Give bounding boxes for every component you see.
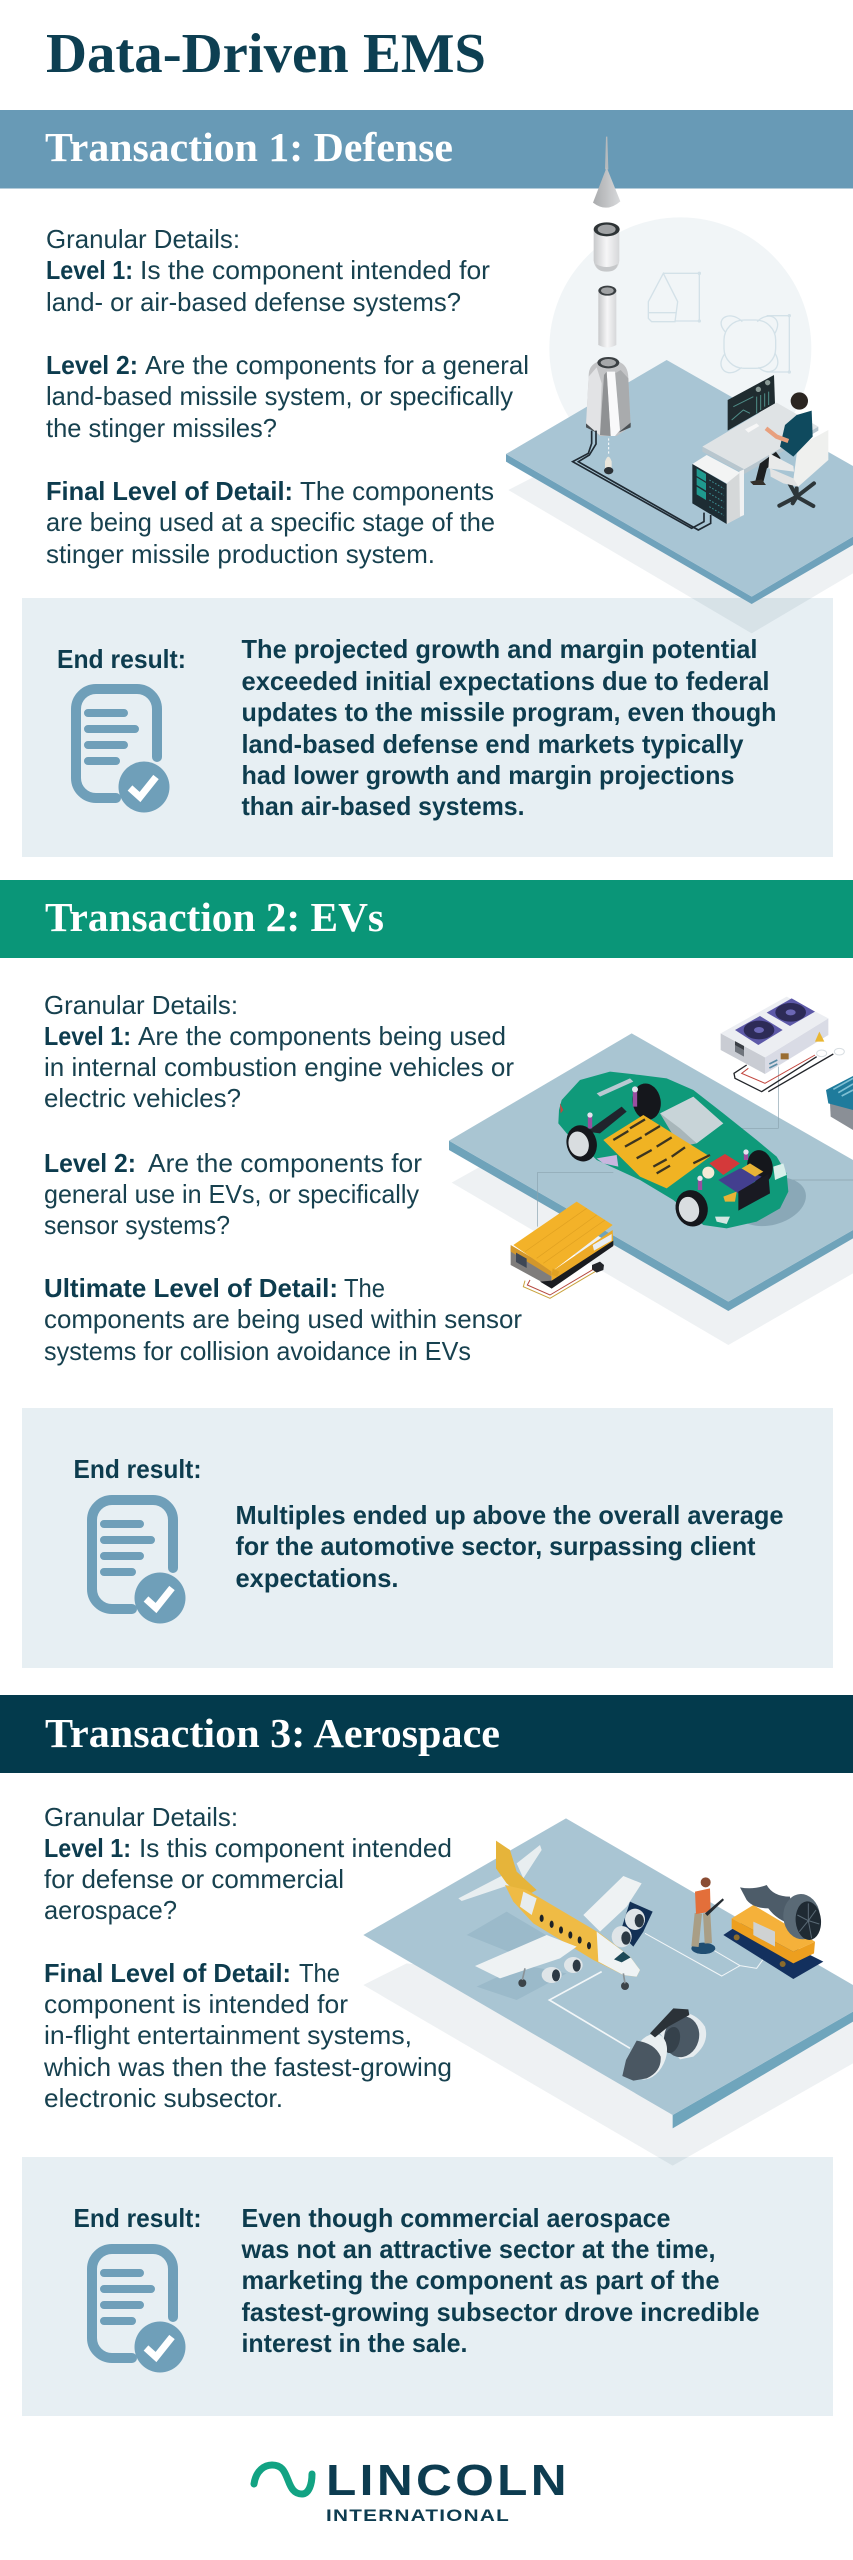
text block: defense details: Granular Details: xyxy=(46,224,240,254)
text block: aerospace details: The xyxy=(299,1958,340,1988)
illustration: defense background circle and blueprints xyxy=(549,217,811,479)
illustration: missile parts xyxy=(586,137,631,436)
text block: EV details: The xyxy=(344,1273,385,1303)
heading band: Transaction 2 xyxy=(0,880,853,958)
text block: defense details xyxy=(46,224,529,569)
text block: EV details: Level 1: xyxy=(44,1021,131,1051)
battery box xyxy=(511,1202,613,1298)
illustration: aerospace platform, plane and engines xyxy=(363,1818,853,2166)
text block: aerospace details: which was then the fastest-growing xyxy=(43,2052,452,2082)
text block: aerospace details: in-flight entertainment systems, xyxy=(44,2020,412,2050)
panel: end result 2: End result: xyxy=(74,1454,202,1484)
icon: document check xyxy=(76,689,170,812)
text block: aerospace details: Is this component intended xyxy=(139,1833,452,1863)
text block: aerospace details: component is intended for xyxy=(44,1989,348,2019)
panel: end result 3 xyxy=(74,2203,760,2372)
icon: document check xyxy=(92,1500,186,1624)
text block: aerospace details xyxy=(43,1802,452,2113)
text block: defense details: are being used at a specific stage of the xyxy=(46,507,495,537)
panel: end result 3: Even though commercial aerospace xyxy=(242,2203,670,2233)
panel: end result 3: End result: xyxy=(74,2203,202,2233)
panel: end result 2: for the automotive sector, surpassing client xyxy=(236,1531,756,1561)
panel: end result 3: interest in the sale. xyxy=(242,2328,468,2358)
title: Data-Driven EMS xyxy=(46,23,486,85)
text block: EV details: Granular Details: xyxy=(44,990,238,1020)
panel: end result 1 background xyxy=(22,598,833,857)
text block: aerospace details: aerospace? xyxy=(44,1895,177,1925)
logo: Lincoln International: LINCOLN xyxy=(326,2456,570,2505)
heading band: Transaction 1: Transaction 1: Defense xyxy=(45,124,453,170)
inspector xyxy=(691,1877,724,1954)
text block: defense details: land- or air-based defense systems? xyxy=(46,287,461,317)
panel: end result 3: marketing the component as part of the xyxy=(242,2265,720,2295)
text block: defense details: Is the component intended for xyxy=(140,255,490,285)
heatsink xyxy=(826,1076,853,1130)
heading band: Transaction 2: Transaction 2: EVs xyxy=(45,894,384,940)
panel: end result 1: End result: xyxy=(57,644,186,674)
illustration: control station xyxy=(573,375,828,530)
heading band: Transaction 3: Transaction 3: Aerospace xyxy=(45,1710,500,1756)
text block: EV details: Level 2: xyxy=(44,1148,136,1178)
text block: defense details: The components xyxy=(300,476,494,506)
panel: end result 1: The projected growth and margin potential xyxy=(242,634,758,664)
panel: end result 3: was not an attractive sector at the time, xyxy=(241,2234,716,2264)
panel: end result 2: Multiples ended up above the overall average xyxy=(236,1500,784,1530)
car body xyxy=(558,1072,788,1230)
text block: defense details: Level 2: xyxy=(46,350,138,380)
text block: EV details xyxy=(44,990,522,1366)
text block: defense details: Are the components for a general xyxy=(145,350,529,380)
illustration: EV platform and car xyxy=(449,997,853,1345)
text block: EV details: Ultimate Level of Detail: xyxy=(44,1273,338,1303)
text block: EV details: electric vehicles? xyxy=(44,1083,241,1113)
text block: defense details: Final Level of Detail: xyxy=(46,476,293,506)
panel: end result 3: fastest-growing subsector drove incredible xyxy=(242,2297,760,2327)
engine on cart xyxy=(723,1885,823,1979)
panel: end result 1: had lower growth and margin projections xyxy=(242,760,734,790)
logo: Lincoln International xyxy=(254,2456,570,2525)
text block: aerospace details: for defense or commercial xyxy=(44,1864,344,1894)
engine on floor xyxy=(622,2008,706,2085)
text block: aerospace details: Final Level of Detail: xyxy=(44,1958,291,1988)
panel: end result 1: exceeded initial expectations due to federal xyxy=(242,666,770,696)
text block: EV details: general use in EVs, or specifically xyxy=(44,1179,419,1209)
text block: EV details: sensor systems? xyxy=(44,1210,230,1240)
text block: aerospace details: Granular Details: xyxy=(44,1802,238,1832)
panel: end result 1: than air-based systems. xyxy=(242,791,524,821)
panel: end result 2: expectations. xyxy=(236,1563,398,1593)
text block: defense details: Level 1: xyxy=(46,255,133,285)
panel: end result 2 xyxy=(22,1408,833,1668)
cooling unit xyxy=(721,997,844,1092)
text block: EV details: components are being used within sensor xyxy=(44,1304,522,1334)
panel: end result 1: updates to the missile program, even though xyxy=(242,697,776,727)
text block: EV details: Are the components being used xyxy=(138,1021,506,1051)
text block: defense details: stinger missile production system. xyxy=(46,539,435,569)
heading band: Transaction 1 xyxy=(0,110,853,188)
icon: document check xyxy=(92,2249,186,2372)
heading band: Transaction 3 xyxy=(0,1695,853,1773)
text block: EV details: systems for collision avoidance in EVs xyxy=(44,1336,471,1366)
text block: defense details: the stinger missiles? xyxy=(46,413,277,443)
panel: end result 1: land-based defense end markets typically xyxy=(242,729,744,759)
text block: EV details: Are the components for xyxy=(148,1148,422,1178)
text block: aerospace details: Level 1: xyxy=(44,1833,131,1863)
plane xyxy=(458,1841,653,1990)
illustration: defense platform xyxy=(506,360,853,633)
text block: aerospace details: electronic subsector. xyxy=(44,2083,283,2113)
panel: end result 3 background xyxy=(22,2157,833,2416)
text block: EV details: in internal combustion engine vehicles or xyxy=(44,1052,514,1082)
panel: end result 1 xyxy=(57,634,776,821)
text block: defense details: land-based missile system, or specifically xyxy=(46,381,513,411)
logo: Lincoln International: INTERNATIONAL xyxy=(326,2507,510,2525)
